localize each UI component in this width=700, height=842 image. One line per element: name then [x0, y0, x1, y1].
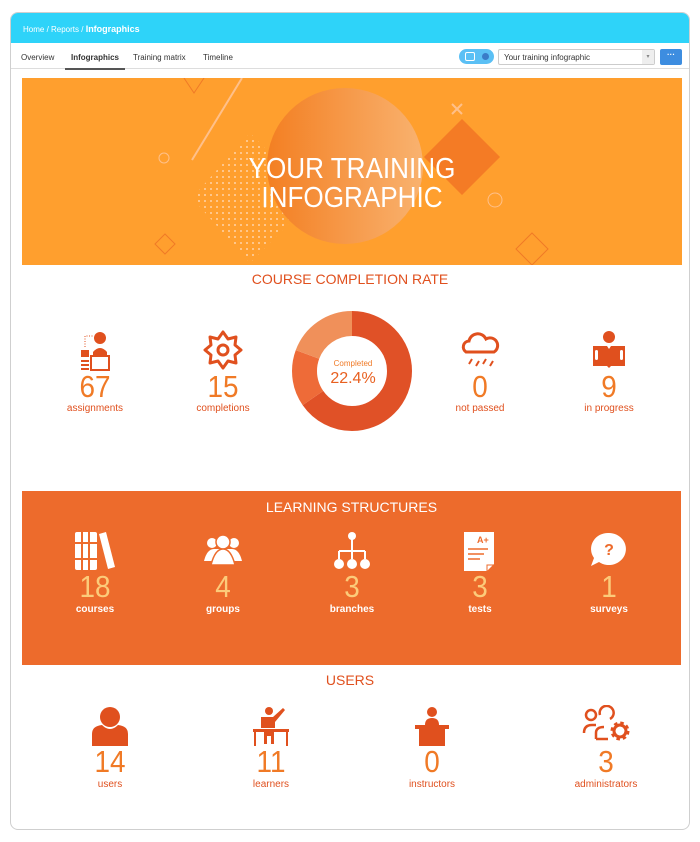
icon: gear [203, 330, 243, 370]
heading: learning structures: LEARNING STRUCTURES [266, 499, 437, 515]
stat: completions [196, 330, 250, 414]
item: tests [464, 532, 494, 615]
stat: assignments [67, 332, 123, 414]
item: surveys: 1 [601, 569, 617, 604]
stat: not passed: not passed [456, 403, 504, 414]
tabs [11, 43, 691, 69]
user: users: 14 [94, 744, 126, 779]
dropdown: Your training infographic [504, 53, 590, 62]
tabs: Infographics [71, 53, 119, 62]
item: branches: 3 [344, 569, 360, 604]
dropdown: ▾ [646, 54, 650, 60]
user: administrators [575, 705, 637, 790]
icon: rain cloud [462, 332, 500, 366]
user: users: users [98, 779, 122, 790]
item: tests: 3 [472, 569, 488, 604]
icon: reader [81, 332, 110, 371]
item: groups [204, 536, 242, 615]
user: learners: 11 [257, 744, 285, 779]
item: surveys [590, 533, 628, 615]
user: learners [253, 707, 289, 790]
user: users [92, 707, 128, 790]
item: tests: A+ [477, 535, 489, 545]
stat: not passed [456, 332, 504, 414]
banner title [249, 153, 455, 214]
panel: learning structures [22, 491, 681, 665]
item: branches [330, 532, 374, 615]
stat: in progress [584, 331, 634, 414]
stat: completions: 15 [207, 369, 239, 404]
icon: reading person [593, 331, 625, 368]
banner title: INFOGRAPHIC [261, 182, 443, 214]
chart: completion donut: 22.4% [330, 370, 376, 387]
tabs: Overview [21, 53, 54, 62]
item: surveys: surveys [590, 604, 628, 615]
more button: ··· [667, 50, 675, 59]
item: courses: courses [76, 604, 114, 615]
toggle [459, 49, 494, 64]
tabs: Timeline [203, 53, 233, 62]
item: surveys: ? [604, 542, 614, 559]
header bar [11, 13, 691, 43]
user: learners: learners [253, 779, 289, 790]
stat: not passed: 0 [472, 369, 488, 404]
tabs: Training matrix [133, 53, 186, 62]
user: instructors [409, 707, 455, 790]
user: administrators: administrators [575, 779, 637, 790]
heading: course completion rate: COURSE COMPLETION RATE [252, 271, 448, 287]
banner title: YOUR TRAINING [249, 153, 455, 185]
more button [660, 49, 682, 65]
user: instructors: 0 [424, 744, 440, 779]
chart: completion donut: Completed [334, 359, 372, 368]
item: courses [75, 532, 115, 615]
stat: assignments: 67 [79, 369, 111, 404]
stat: completions: completions [196, 403, 250, 414]
item: groups: 4 [215, 569, 231, 604]
stat: assignments: assignments [67, 403, 123, 414]
item: tests: tests [468, 604, 492, 615]
user: instructors: instructors [409, 779, 455, 790]
stat: in progress: in progress [584, 403, 634, 414]
user: administrators: 3 [598, 744, 614, 779]
dropdown [498, 49, 655, 65]
header bar: Home / Reports / Infographics [23, 24, 140, 34]
item: courses: 18 [79, 569, 111, 604]
heading: users: USERS [326, 672, 374, 688]
banner [22, 78, 682, 265]
chart: completion donut [292, 311, 412, 431]
item: branches: branches [330, 604, 374, 615]
stat: in progress: 9 [601, 369, 617, 404]
item: groups: groups [206, 604, 240, 615]
